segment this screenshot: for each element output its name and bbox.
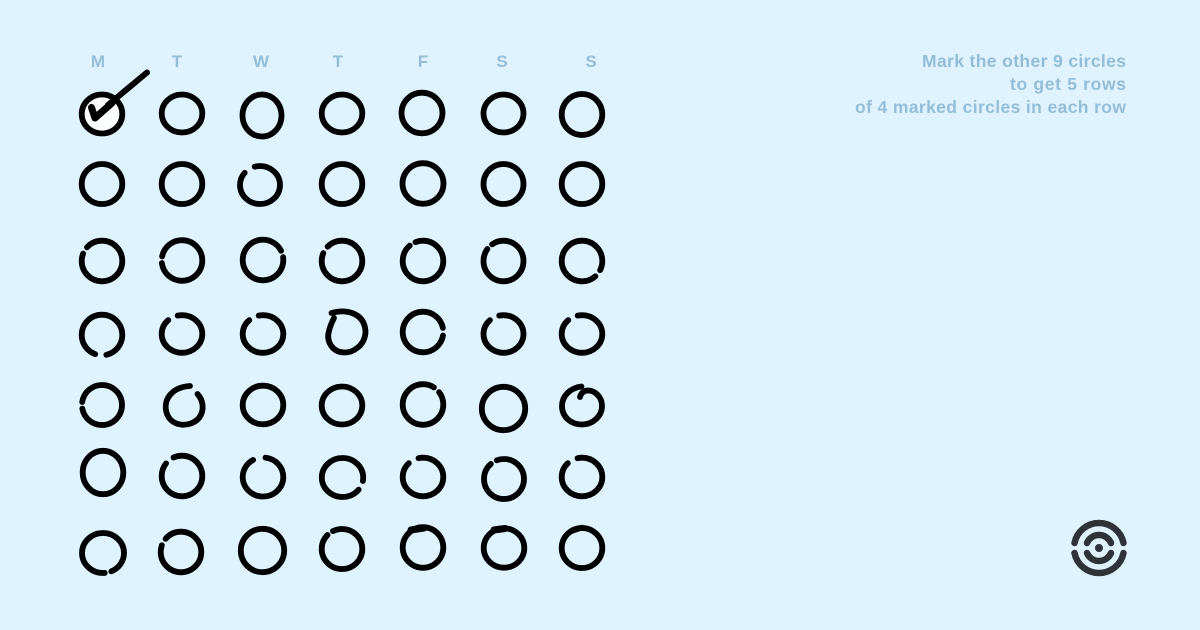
weekday labels: M (91, 52, 105, 71)
weekday labels: S (496, 52, 508, 71)
row 7 (82, 527, 602, 573)
weekday labels (91, 52, 597, 71)
row 3 (82, 240, 602, 281)
weekday labels: T (172, 52, 183, 71)
weekday labels: S (585, 52, 597, 71)
weekday labels: T (333, 52, 344, 71)
weekday labels: F (418, 52, 428, 71)
row 6 (83, 451, 602, 499)
circle grid (82, 72, 602, 573)
instruction text: Mark the other 9 circles (922, 51, 1126, 71)
instruction text: to get 5 rows (1010, 74, 1126, 94)
logo (1074, 523, 1124, 573)
row 1 (82, 72, 602, 136)
weekday labels: W (253, 52, 270, 71)
row 4 (82, 311, 602, 355)
marked circle with check (82, 72, 147, 134)
row 5 (82, 384, 602, 430)
instruction text (855, 51, 1126, 117)
row 2 (82, 163, 602, 204)
instruction text: of 4 marked circles in each row (855, 97, 1126, 117)
